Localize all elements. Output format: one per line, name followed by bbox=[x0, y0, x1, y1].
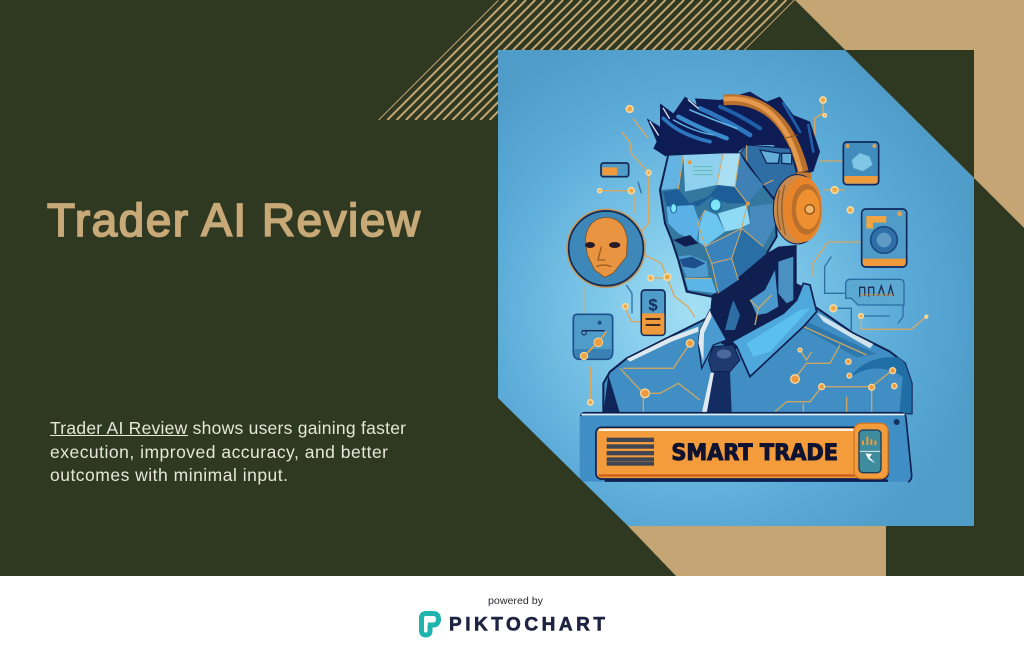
icon: dollar card bbox=[641, 290, 665, 335]
headphones band bbox=[723, 99, 808, 172]
figure: side of head bbox=[740, 145, 797, 198]
nodes bbox=[588, 97, 928, 405]
SMART TRADE panel bbox=[580, 413, 912, 482]
figure: shirt and shoulders bbox=[603, 303, 912, 413]
nose shadow bbox=[673, 235, 698, 247]
icon: gear card bbox=[862, 209, 907, 267]
Piktochart wordmark: PIKTOCHART bbox=[449, 614, 605, 636]
figure: hair bbox=[647, 92, 820, 175]
diagonal stripes bbox=[378, 0, 795, 120]
Piktochart logo icon bbox=[422, 614, 438, 635]
description text: execution, improved accuracy, and better bbox=[50, 442, 388, 462]
icon: chart card bbox=[573, 314, 613, 360]
description text bbox=[50, 418, 406, 485]
illustration: AI trader portrait bbox=[498, 50, 974, 526]
icon: mask medallion bbox=[567, 209, 645, 287]
tan corner shape bbox=[795, 0, 1024, 228]
title: Trader AI Review bbox=[47, 194, 421, 246]
description text: outcomes with minimal input. bbox=[50, 465, 288, 485]
figure: neck bbox=[710, 245, 810, 350]
SMART TRADE label: SMART TRADE bbox=[671, 441, 838, 466]
brow bbox=[663, 185, 747, 207]
figure: collar and tie bbox=[698, 283, 817, 413]
forehead bbox=[661, 155, 683, 190]
circuit lines bbox=[585, 100, 926, 400]
icon: gem card bbox=[843, 142, 879, 185]
icon: dollar card: $ bbox=[648, 296, 658, 315]
orange button bbox=[596, 427, 888, 479]
chin bbox=[685, 278, 717, 293]
figure: polygon face bbox=[660, 153, 777, 297]
dark frame right of image bbox=[845, 50, 974, 178]
nose and cheek lit bbox=[667, 205, 700, 242]
tan bottom shape bbox=[628, 526, 886, 576]
icon: small slider card bbox=[601, 163, 629, 177]
icon: waveform panel bbox=[846, 279, 904, 305]
mini chart widget bbox=[854, 423, 888, 479]
mouth bbox=[678, 255, 708, 277]
dark lower right block bbox=[886, 178, 1024, 576]
vents bbox=[607, 438, 654, 466]
headphone ear cup bbox=[773, 173, 822, 244]
powered by label: powered by bbox=[488, 595, 544, 607]
facet seams bbox=[678, 153, 763, 293]
description text: Trader AI Review shows users gaining faster bbox=[50, 418, 406, 438]
footer bar bbox=[0, 576, 1024, 656]
